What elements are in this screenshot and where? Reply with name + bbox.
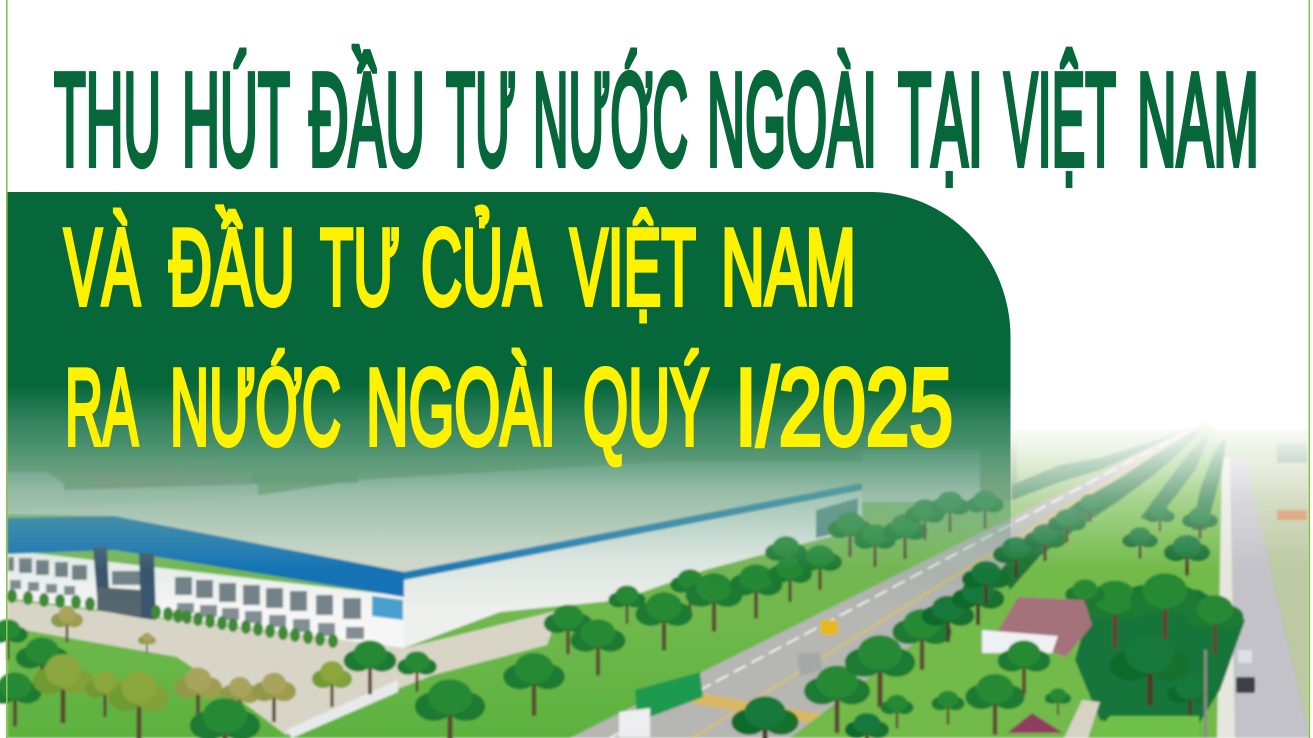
title: HÚT: [182, 46, 290, 193]
title: ĐẦU: [309, 46, 425, 193]
title: TƯ: [446, 46, 516, 193]
white fence: [286, 680, 398, 738]
title: NƯỚC: [533, 46, 688, 193]
utility pole: [1204, 650, 1207, 738]
factory right wall: [404, 488, 862, 648]
lawn ground: [7, 430, 1309, 738]
subtitle line 1: [64, 206, 856, 328]
windows upper row: [8, 557, 361, 619]
white pavilion sign: [982, 630, 1058, 653]
factory front blue fascia: [7, 516, 404, 597]
far landscape strip: [7, 440, 1017, 500]
road white lane line: [610, 420, 1207, 738]
vehicle: yellow car: [820, 620, 838, 635]
far tree row along road: [1000, 430, 1200, 590]
right lawn: [790, 420, 1222, 738]
trees: row beside main road, left side: [544, 490, 1004, 676]
right roadside land: [1245, 457, 1309, 735]
factory logo sign: [372, 596, 403, 620]
footpath: [1064, 700, 1100, 738]
factory front wall: [7, 550, 404, 648]
panel: green subtitle block: [7, 192, 1010, 610]
crossing stripe: [692, 693, 835, 726]
trees: row beside main road, right side: [731, 494, 1106, 738]
far building brown roof: [72, 464, 258, 490]
entrance pillars: [93, 547, 109, 596]
subtitle line 2: QUÝ: [583, 346, 709, 468]
main road: [570, 420, 1207, 738]
photo: industrial park aerial view: [0, 412, 1309, 738]
title: TẠI: [898, 46, 983, 193]
subtitle line 1: VÀ: [64, 206, 140, 328]
subtitle line 1: NAM: [721, 206, 856, 328]
pavement in front of factory: [7, 600, 560, 735]
far dark tree patch: [1277, 443, 1307, 463]
trees: mid-ground and palm cluster: [845, 505, 1244, 738]
title: THU: [54, 46, 161, 193]
factory roof: [7, 462, 862, 572]
pale lawn bottom right: [1092, 716, 1199, 738]
far building behind factory: [862, 450, 980, 502]
dense palm cluster underlay: [1075, 585, 1245, 738]
vehicle: silver car on side road: [1238, 650, 1252, 663]
subtitle line 2: RA: [65, 346, 138, 468]
orange roadside building: [1277, 510, 1307, 520]
far tree row in median: [1140, 436, 1208, 522]
right side pavement strip: [1217, 457, 1235, 738]
pink-roof pavilion: [997, 597, 1092, 657]
far tree row left of road: [1012, 428, 1190, 500]
far building left: [7, 472, 64, 514]
title: NGOÀI: [707, 46, 877, 193]
far tree band on roof horizon: [252, 473, 358, 483]
subtitle line 2: [65, 346, 953, 468]
entrance lobby: [97, 587, 141, 618]
factory right blue fascia: [404, 483, 862, 580]
subtitle line 1: VIỆT: [570, 206, 696, 328]
vehicle: dark car on side road: [1236, 677, 1255, 693]
subtitle line 1: CỦA: [421, 206, 541, 328]
windows lower row: [10, 580, 364, 639]
small pink kiosk: [1007, 713, 1063, 733]
vehicle: green container truck: [619, 672, 703, 737]
right side road: [1230, 457, 1309, 738]
subtitle line 2: NƯỚC: [170, 346, 341, 468]
vehicle: grey van: [797, 652, 822, 676]
hedge: [7, 589, 338, 648]
trees: foreground left of factory: [0, 607, 565, 738]
subtitle line 1: ĐẦU: [169, 206, 295, 328]
road centre yellow line: [692, 420, 1207, 738]
far tree row by side road: [1192, 438, 1226, 530]
right wall dark shopfronts: [816, 498, 858, 538]
subtitle line 2: NGOÀI: [366, 346, 556, 468]
title: [54, 46, 1259, 193]
pavilion foreground tree: [998, 640, 1050, 694]
title: VIỆT: [1004, 46, 1116, 193]
haze over horizon: [7, 412, 1309, 570]
subtitle line 1: TƯ: [320, 206, 400, 328]
subtitle line 2: I/2025: [735, 346, 953, 468]
